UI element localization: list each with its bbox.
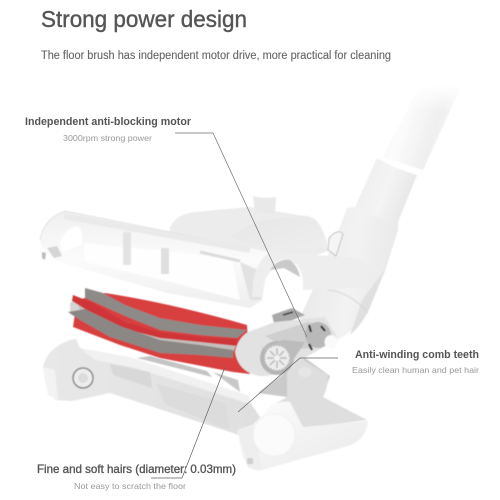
lower tray [43, 339, 262, 436]
label: soft hairs: Not easy to scratch the floor [74, 481, 186, 491]
comb gear [266, 346, 288, 370]
label: anti-blocking motor: Independent anti-blocking motor [25, 116, 192, 128]
label: anti-blocking motor [25, 116, 192, 143]
label: comb teeth: Anti-winding comb teeth [355, 349, 479, 361]
under-housing mechanism [258, 358, 330, 397]
leader line: soft hairs [151, 367, 225, 478]
arch front plate [252, 252, 372, 297]
vacuum floor brush illustration [40, 85, 466, 470]
label: soft hairs [37, 462, 236, 491]
belt drive housing [235, 308, 338, 376]
tube collar and elbow [300, 158, 417, 342]
title: Strong power design [41, 6, 247, 32]
cover clip [253, 196, 276, 214]
white end cap [237, 402, 368, 470]
label: soft hairs: Fine and soft hairs (diameter: 0.03mm) [37, 462, 236, 476]
arch opening [270, 260, 300, 277]
label: anti-blocking motor: 3000rpm strong power [63, 133, 152, 143]
handle tube [383, 85, 466, 170]
roller bearing [298, 367, 312, 377]
roller brush [68, 288, 250, 374]
upper cover shell [40, 211, 270, 308]
label: comb teeth: Easily clean human and pet hair [352, 365, 479, 375]
upper cover back surface [170, 207, 330, 262]
label: comb teeth [352, 349, 479, 375]
elbow hinge [328, 232, 343, 256]
lower tray back wall [270, 358, 367, 428]
drive knob [324, 335, 338, 349]
leader line: anti-blocking motor [175, 133, 307, 337]
leader line: comb teeth [238, 358, 338, 412]
centre bump [230, 216, 328, 250]
subtitle: The floor brush has independent motor drive, more practical for cleaning [41, 50, 391, 62]
